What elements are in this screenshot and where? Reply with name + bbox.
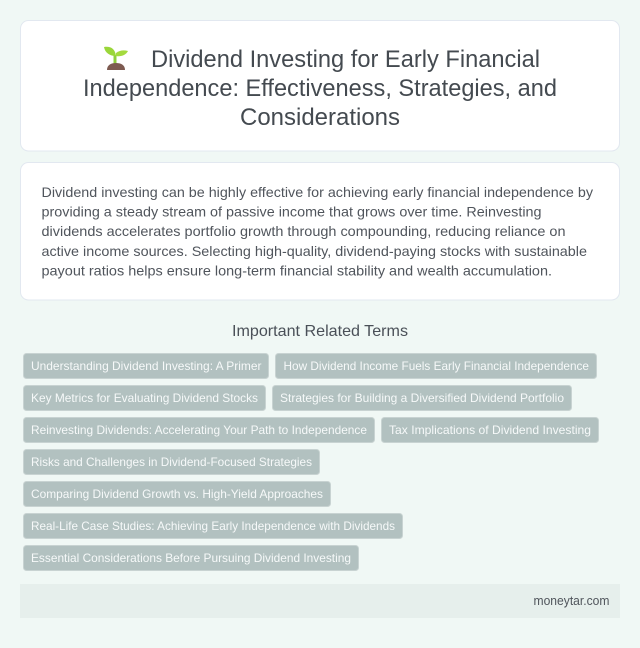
summary text xyxy=(42,184,593,278)
panel: related term tags: Comparing Dividend Growth vs. High-Yield Approaches xyxy=(31,487,323,501)
panel: related term tags: Key Metrics for Evaluating Dividend Stocks xyxy=(31,391,258,405)
summary text: Dividend investing can be highly effective for achieving early financial independence by xyxy=(42,184,593,200)
footer bar xyxy=(20,584,620,618)
panel: related term tags: Understanding Dividend Investing: A Primer xyxy=(31,359,262,373)
panel: summary card xyxy=(20,162,620,300)
summary text: dividends accelerates portfolio growth through compounding, reducing reliance on xyxy=(42,223,566,239)
title: Independence: Effectiveness, Strategies, and xyxy=(83,75,557,102)
title: Dividend Investing for Early Financial xyxy=(151,46,540,73)
icon: seedling xyxy=(104,47,128,70)
panel: related term tags: Tax Implications of Dividend Investing xyxy=(389,423,591,437)
panel: related term tags xyxy=(24,354,598,570)
panel: related term tags: Risks and Challenges in Dividend-Focused Strategies xyxy=(31,455,312,469)
summary text: payout ratios helps ensure long-term financial stability and wealth accumulation. xyxy=(42,262,552,278)
summary text: providing a steady stream of passive income that grows over time. Reinvesting xyxy=(42,204,542,220)
panel: related term tags: Essential Considerations Before Pursuing Dividend Investing xyxy=(31,551,351,565)
panel: title card xyxy=(20,20,620,151)
panel: related term tags: How Dividend Income Fuels Early Financial Independence xyxy=(284,359,589,373)
footer source text: moneytar.com xyxy=(534,593,610,608)
title xyxy=(83,46,557,131)
title: Considerations xyxy=(240,104,400,131)
panel: related term tags: Reinvesting Dividends: Accelerating Your Path to Independence xyxy=(31,423,367,437)
summary text: active income sources. Selecting high-quality, dividend-paying stocks with sustainable xyxy=(42,243,587,259)
panel: related term tags: Strategies for Building a Diversified Dividend Portfolio xyxy=(280,391,564,405)
heading: important related terms: Important Related Terms xyxy=(232,323,408,340)
panel: related term tags: Real-Life Case Studies: Achieving Early Independence with Dividends xyxy=(31,519,395,533)
